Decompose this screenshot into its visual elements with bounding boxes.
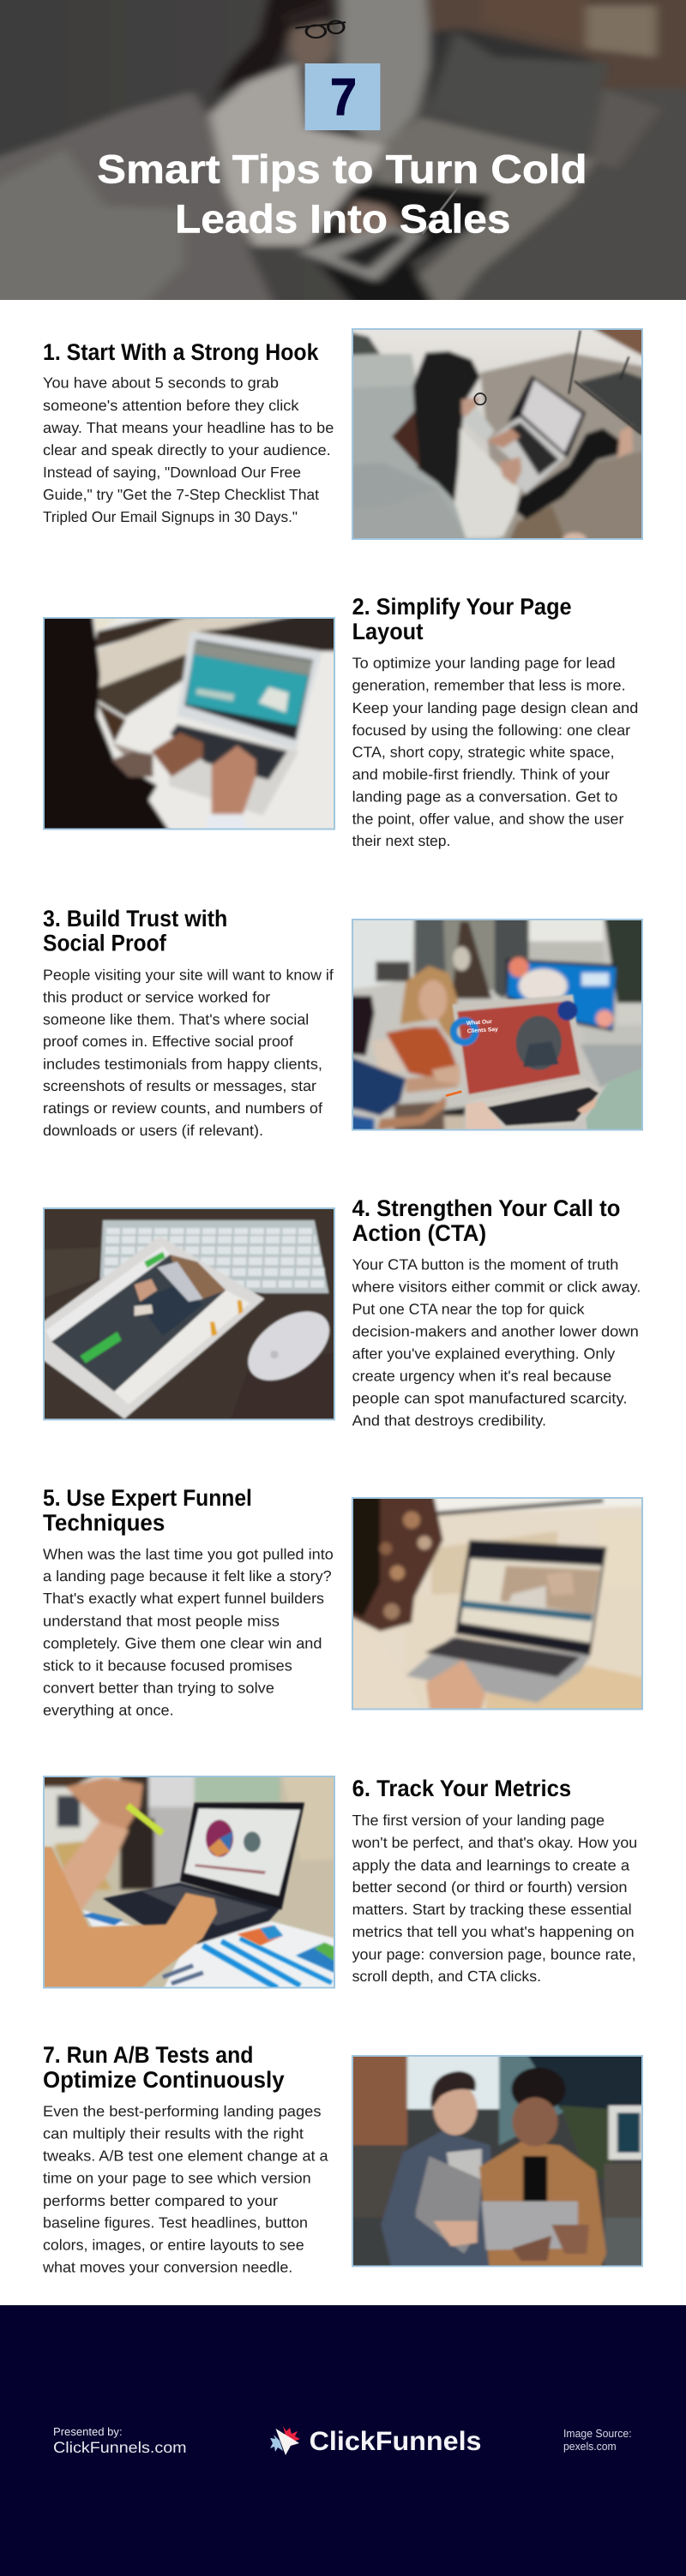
hero background photo: woman with laptop on sofa, darkened — [0, 0, 686, 300]
text block: tip 2: CTA, short copy, strategic white space, — [352, 744, 615, 761]
text block: tip 2 — [352, 655, 638, 849]
text block: tip 1 — [43, 374, 334, 525]
text block: tip 2: Keep your landing page design clean and — [352, 699, 638, 716]
text block: tip 7: can multiply their results with the right — [43, 2125, 304, 2142]
text block: tip 4: after you've explained everything. Only — [352, 1345, 615, 1362]
text block: tip 7 — [42, 2102, 328, 2276]
text block: tip 2: the point, offer value, and show the user — [352, 810, 624, 827]
text block: tip 1: away. That means your headline has to be — [43, 419, 334, 436]
photo: woman working on laptop on sofa — [340, 317, 654, 554]
text block: tip 3: ratings or review counts, and numbers of — [43, 1099, 322, 1117]
text block: tip 5: stick to it because focused promises — [43, 1656, 292, 1674]
text block: tip 7: tweaks. A/B test one element change at a — [43, 2148, 328, 2165]
text block: tip 3: proof comes in. Effective social proof — [43, 1033, 293, 1050]
text block: tip 4: people can spot manufactured scarcity. — [352, 1390, 628, 1407]
text block: tip 5: understand that most people miss — [43, 1613, 280, 1630]
text block: tip 5: That's exactly what expert funnel builders — [43, 1590, 324, 1607]
text block: tip 4: where visitors either commit or click away. — [352, 1278, 641, 1295]
heading: tip 6: 6. Track Your Metrics — [352, 1776, 571, 1801]
text block: tip 6: The first version of your landing page — [352, 1812, 605, 1829]
icon: ClickFunnels cursor logo — [270, 2426, 300, 2455]
footer credit: presented by: Presented by: — [53, 2425, 123, 2438]
heading: tip 4: Action (CTA) — [352, 1220, 486, 1246]
heading: tip 2: Layout — [352, 619, 424, 644]
heading: tip 7: Optimize Continuously — [43, 2067, 285, 2093]
text block: tip 1: Instead of saying, "Download Our Free — [43, 464, 301, 481]
photo: man and woman looking at laptops — [337, 2044, 657, 2279]
heading: tip 5 — [43, 1485, 252, 1536]
heading: tip 4 — [352, 1195, 620, 1246]
text block: tip 5 — [43, 1545, 334, 1719]
text block: tip 2: generation, remember that less is more. — [352, 677, 626, 694]
panel: tip 5 — [43, 1485, 654, 1722]
text block: tip 5: completely. Give them one clear win and — [43, 1634, 322, 1651]
photo: curly-haired person at laptop on wooden table — [340, 1486, 654, 1722]
text block: tip 6: your page: conversion page, bounce rate, — [352, 1945, 636, 1962]
text block: tip 2: To optimize your landing page for lead — [352, 655, 616, 672]
text block: tip 4: And that destroys credibility. — [352, 1412, 546, 1429]
heading: tip 7: 7. Run A/B Tests and — [43, 2042, 253, 2068]
photo: tablet, keyboard and mouse on wood desk — [32, 1196, 346, 1433]
footer credit: image source: Image Source: — [563, 2427, 632, 2440]
text block: tip 4: decision-makers and another lower down — [352, 1323, 639, 1340]
logo wordmark: ClickFunnels: ClickFunnels — [310, 2426, 482, 2456]
text block: tip 3: someone like them. That's where social — [43, 1010, 309, 1027]
text block: tip 2: landing page as a conversation. Get to — [352, 788, 617, 805]
panel: footer — [0, 2305, 686, 2576]
text block: tip 4 — [352, 1255, 641, 1429]
text block: tip 7: what moves your conversion needle. — [42, 2259, 292, 2276]
text block: tip 7: colors, images, or entire layouts to see — [43, 2237, 304, 2254]
text block: tip 3: downloads or users (if relevant). — [43, 1122, 263, 1139]
text block: tip 7: baseline figures. Test headlines, button — [43, 2214, 308, 2232]
text block: tip 3: this product or service worked for — [43, 988, 270, 1005]
panel: tip 6 — [32, 1764, 637, 2001]
panel: tip 1 — [43, 317, 654, 554]
heading: tip 1: 1. Start With a Strong Hook — [43, 339, 319, 365]
text block: tip 4: Put one CTA near the top for quick — [352, 1301, 585, 1318]
heading: tip 4: 4. Strengthen Your Call to — [352, 1195, 620, 1221]
photo: team viewing testimonial slide on laptop: Clients Say — [467, 1026, 498, 1034]
text block: tip 6: metrics that tell you what's happening on — [352, 1923, 635, 1940]
text block: tip 6: matters. Start by tracking these essential — [352, 1901, 632, 1918]
text block: tip 3: screenshots of results or messages, star — [43, 1077, 316, 1094]
hero title: Leads Into Sales — [175, 196, 510, 242]
text block: tip 5: convert better than trying to solve — [43, 1680, 274, 1697]
heading: tip 5: 5. Use Expert Funnel — [43, 1485, 252, 1511]
heading: tip 3 — [43, 906, 227, 956]
panel: tip 2 — [32, 594, 638, 849]
heading: tip 3: Social Proof — [43, 931, 167, 956]
text block: tip 5: everything at once. — [43, 1702, 174, 1719]
text block: tip 6: apply the data and learnings to create a — [352, 1856, 629, 1873]
text block: tip 1: Tripled Our Email Signups in 30 Days." — [43, 508, 298, 525]
footer credit: presented by — [53, 2425, 187, 2456]
photo: team viewing testimonial slide on laptop — [340, 908, 654, 1144]
panel: tip 3 — [43, 906, 654, 1144]
text block: tip 6: won't be perfect, and that's okay. How you — [352, 1834, 637, 1851]
photo: laptop with pie charts and printed reports — [32, 1764, 346, 2001]
text block: tip 7: time on your page to see which version — [43, 2170, 311, 2187]
heading: tip 7 — [43, 2042, 285, 2093]
text block: tip 1: Guide," try "Get the 7-Step Checklist That — [43, 486, 319, 503]
text block: tip 3: People visiting your site will want to know if — [43, 967, 334, 984]
heading: tip 2: 2. Simplify Your Page — [352, 594, 572, 620]
photo: laptop with teal website on white table — [32, 606, 346, 842]
heading: tip 3: 3. Build Trust with — [43, 906, 227, 932]
text block: tip 1: someone's attention before they click — [43, 397, 299, 414]
text block: tip 2: focused by using the following: one clear — [352, 722, 630, 739]
text block: tip 5: a landing page because it felt like a story? — [43, 1567, 332, 1585]
panel: tip 7 — [42, 2042, 657, 2279]
text block: tip 6: better second (or third or fourth) version — [352, 1878, 628, 1896]
number badge: 7 — [305, 63, 380, 130]
text block: tip 7: Even the best-performing landing pages — [43, 2102, 322, 2119]
text block: tip 4: create urgency when it's real because — [352, 1367, 611, 1384]
text block: tip 2: and mobile-first friendly. Think of your — [352, 766, 610, 783]
text block: tip 1: clear and speak directly to your audience. — [43, 441, 331, 458]
text block: tip 3 — [43, 967, 334, 1139]
footer credit: image source — [563, 2427, 632, 2453]
heading: tip 2 — [352, 594, 572, 644]
text block: tip 2: their next step. — [352, 832, 450, 849]
text block: tip 6: scroll depth, and CTA clicks. — [352, 1968, 541, 1985]
text block: tip 4: Your CTA button is the moment of truth — [352, 1255, 618, 1273]
hero title: Smart Tips to Turn Cold — [97, 146, 587, 191]
heading: tip 5: Techniques — [43, 1510, 165, 1536]
footer credit: image source: pexels.com — [563, 2440, 617, 2453]
text block: tip 1: You have about 5 seconds to grab — [43, 374, 279, 392]
hero title — [97, 146, 587, 242]
text block: tip 7: performs better compared to your — [43, 2192, 278, 2209]
number badge: 7: 7 — [330, 68, 357, 126]
text block: tip 3: includes testimonials from happy clients, — [43, 1056, 322, 1073]
text block: tip 6 — [352, 1812, 637, 1985]
photo: team viewing testimonial slide on laptop: What Our — [466, 1018, 492, 1027]
panel: hero header — [0, 0, 686, 317]
footer credit: presented by: ClickFunnels.com — [53, 2439, 187, 2456]
panel: tip 4 — [32, 1195, 641, 1433]
text block: tip 5: When was the last time you got pulled into — [43, 1545, 334, 1562]
